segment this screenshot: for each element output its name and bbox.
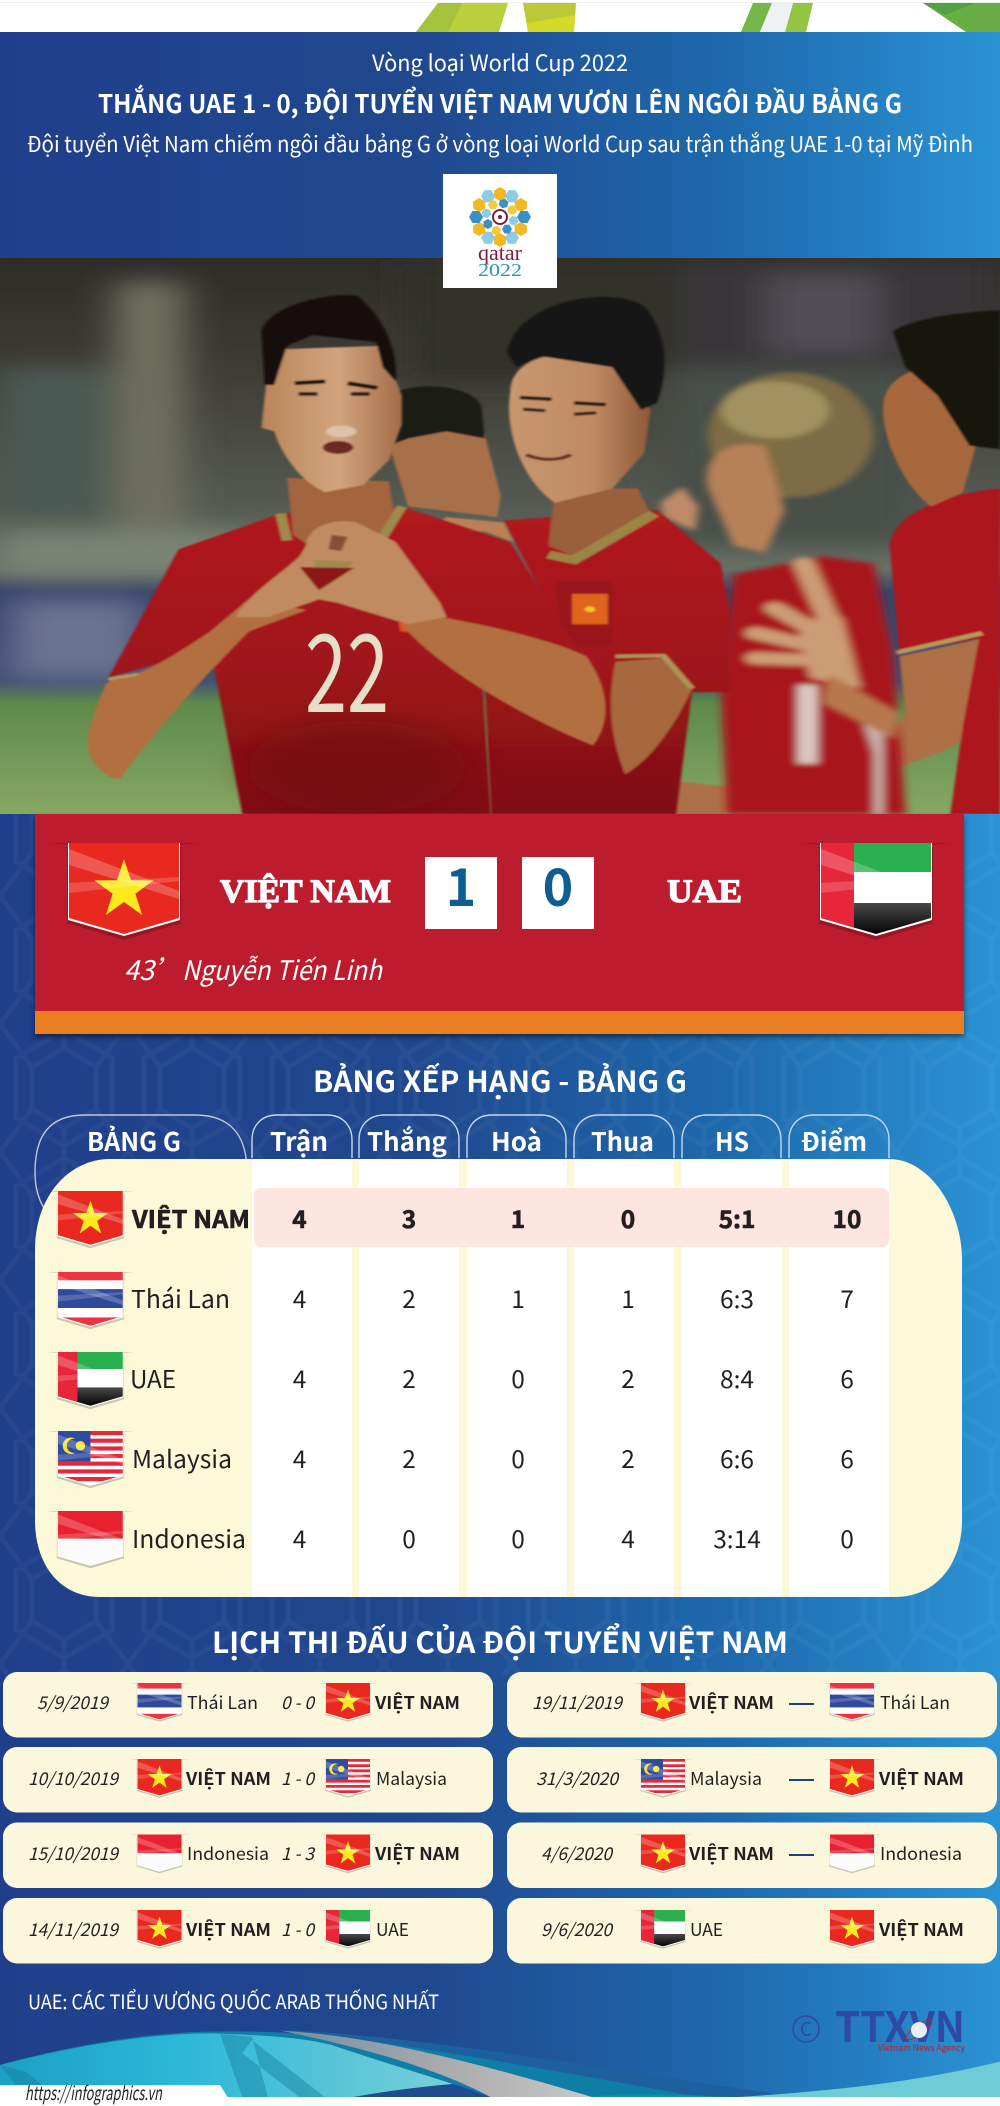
match 4/6/2020: Indonesia <box>880 1841 962 1866</box>
match 5/9/2019: Thái Lan <box>187 1690 258 1715</box>
heading: standings: BẢNG XẾP HẠNG - BẢNG G <box>313 1059 687 1101</box>
goal scorer: 43’ <box>124 949 181 988</box>
row: Thái Lan: 1 <box>511 1281 525 1316</box>
player far right <box>670 310 1000 814</box>
row: Indonesia: 0 <box>402 1521 416 1556</box>
row: Indonesia: 0 <box>840 1521 854 1556</box>
match 9/6/2020 <box>507 1898 997 1964</box>
row: Malaysia: 0 <box>511 1441 525 1476</box>
source URL tab: https://infographics.vn <box>25 2079 163 2106</box>
match 10/10/2019: Malaysia <box>376 1766 447 1791</box>
row: Việt Nam: 10 <box>833 1201 861 1236</box>
match 31/3/2020: Malaysia <box>690 1766 762 1791</box>
match 10/10/2019 <box>3 1747 493 1812</box>
panel: match score <box>35 814 964 1034</box>
match 5/9/2019: VIỆT NAM <box>374 1690 460 1715</box>
decorative green shapes on top strip <box>0 2 1000 32</box>
kicker text: Vòng loại World Cup 2022 <box>372 46 628 78</box>
row: UAE: 0 <box>511 1361 525 1396</box>
header tabs <box>35 1115 889 1222</box>
match 15/10/2019: 15/10/2019 <box>28 1841 120 1866</box>
match 9/6/2020: UAE <box>690 1917 723 1942</box>
panel: standings table <box>35 1115 962 1597</box>
row: Malaysia: 6 <box>840 1441 854 1476</box>
team name UAE: UAE <box>667 874 742 910</box>
panel: schedule right column <box>507 1672 997 1964</box>
icon: UAE flag <box>801 843 951 940</box>
match 9/6/2020: VIỆT NAM <box>878 1917 964 1942</box>
panel: schedule left column <box>3 1672 493 1964</box>
header labels: HS <box>715 1122 749 1159</box>
highlighted row <box>254 1188 889 1247</box>
row: UAE: 2 <box>621 1361 635 1396</box>
row: Malaysia <box>46 1431 854 1488</box>
row: Indonesia: 4 <box>621 1521 635 1556</box>
row: Việt Nam: VIỆT NAM <box>131 1201 250 1236</box>
jersey number 22: 22 <box>305 588 389 744</box>
row: Việt Nam: 5:1 <box>719 1201 755 1236</box>
header labels: Thắng <box>367 1122 447 1159</box>
match 5/9/2019 <box>3 1672 493 1738</box>
header labels <box>87 1122 867 1159</box>
main title: THẮNG UAE 1 - 0, ĐỘI TUYỂN VIỆT NAM VƯƠN LÊN NGÔI ĐẦU BẢNG G <box>98 84 902 121</box>
match 4/6/2020: VIỆT NAM <box>688 1841 774 1866</box>
match 4/6/2020: 4/6/2020 <box>541 1841 614 1866</box>
row: Thái Lan: 1 <box>621 1281 635 1316</box>
emblem mosaic <box>469 187 531 247</box>
match 14/11/2019: 1 - 0 <box>281 1917 316 1942</box>
row: UAE: 4 <box>293 1361 306 1396</box>
row: Indonesia: Indonesia <box>132 1521 246 1556</box>
match 9/6/2020: 9/6/2020 <box>541 1917 614 1942</box>
match 15/10/2019 <box>3 1822 493 1888</box>
match 14/11/2019: VIỆT NAM <box>185 1917 271 1942</box>
score box home <box>425 846 497 929</box>
row: UAE: 2 <box>402 1361 416 1396</box>
match 19/11/2019 <box>507 1672 997 1738</box>
row: Thái Lan: 2 <box>402 1281 416 1316</box>
photo: Vietnamese players celebrating <box>0 258 1000 814</box>
player behind main <box>389 386 501 517</box>
match 14/11/2019: UAE <box>376 1917 409 1942</box>
blond player behind <box>660 372 906 814</box>
row: Indonesia: 4 <box>293 1521 306 1556</box>
header labels: Thua <box>591 1122 654 1159</box>
match 19/11/2019: Thái Lan <box>880 1690 950 1715</box>
row: UAE <box>46 1352 854 1409</box>
logo: TTXVN: TTXVN <box>835 1994 965 2055</box>
score box away: 0 <box>543 846 573 921</box>
footer wave <box>0 2030 1000 2097</box>
row: Malaysia: 2 <box>621 1441 635 1476</box>
background arabesque pattern <box>0 814 1000 1676</box>
match 31/3/2020: 31/3/2020 <box>536 1766 620 1791</box>
header labels: Điểm <box>801 1122 867 1159</box>
row: Thái Lan: 7 <box>840 1281 854 1316</box>
main player number 22 jersey <box>88 295 606 814</box>
row: Indonesia <box>46 1511 854 1568</box>
match 19/11/2019: VIỆT NAM <box>688 1690 774 1715</box>
row: Việt Nam: 1 <box>511 1201 525 1236</box>
bottom white strip <box>0 2097 1000 2106</box>
row: Indonesia: 3:14 <box>713 1521 761 1556</box>
header labels: BẢNG G <box>87 1122 181 1159</box>
match 15/10/2019: VIỆT NAM <box>374 1841 460 1866</box>
row: Indonesia: 0 <box>511 1521 525 1556</box>
icon: Vietnam flag <box>49 843 199 940</box>
row: Thái Lan: Thái Lan <box>131 1281 230 1316</box>
row: Việt Nam: 3 <box>402 1201 416 1236</box>
score box away <box>522 846 594 929</box>
header labels: Hoà <box>491 1122 542 1159</box>
row: Việt Nam <box>46 1191 861 1248</box>
logo wordmark qatar: qatar <box>478 240 523 265</box>
table cream background <box>35 1159 962 1597</box>
goal scorer: Nguyễn Tiến Linh <box>182 949 383 988</box>
match 5/9/2019: 0 - 0 <box>281 1690 316 1715</box>
header labels: Trận <box>270 1122 328 1159</box>
heading: schedule: LỊCH THI ĐẤU CỦA ĐỘI TUYỂN VIỆT NAM <box>212 1620 788 1662</box>
row: Thái Lan <box>46 1272 854 1329</box>
row: Thái Lan: 6:3 <box>720 1281 754 1316</box>
score box home: 1 <box>446 846 476 921</box>
second player smiling <box>421 297 730 814</box>
match 10/10/2019: VIỆT NAM <box>185 1766 271 1791</box>
logo wordmark 2022: 2022 <box>478 260 522 280</box>
match 15/10/2019: 1 - 3 <box>281 1841 316 1866</box>
row: Việt Nam: 0 <box>621 1201 635 1236</box>
white columns <box>252 1159 889 1597</box>
match 31/3/2020: VIỆT NAM <box>878 1766 964 1791</box>
match 10/10/2019: 1 - 0 <box>281 1766 316 1791</box>
logo: TTXVN: Vietnam News Agency <box>878 2041 965 2054</box>
header text block <box>27 46 973 159</box>
row: UAE: 6 <box>840 1361 854 1396</box>
match 31/3/2020 <box>507 1747 997 1812</box>
row: Thái Lan: 4 <box>293 1281 306 1316</box>
row: Malaysia: 2 <box>402 1441 416 1476</box>
row: Malaysia: 6:6 <box>720 1441 754 1476</box>
match 14/11/2019 <box>3 1898 493 1964</box>
match 5/9/2019: 5/9/2019 <box>37 1690 110 1715</box>
match 15/10/2019: Indonesia <box>187 1841 269 1866</box>
row: Malaysia: 4 <box>293 1441 306 1476</box>
match 19/11/2019: 19/11/2019 <box>532 1690 624 1715</box>
row: Việt Nam: 4 <box>292 1201 307 1236</box>
logo: Qatar 2022 <box>443 174 557 288</box>
match 14/11/2019: 14/11/2019 <box>28 1917 120 1942</box>
match 10/10/2019: 10/10/2019 <box>28 1766 120 1791</box>
footnote: UAE: CÁC TIỂU VƯƠNG QUỐC ARAB THỐNG NHẤT <box>28 1986 439 2015</box>
logo: TTXVN: C <box>800 2015 812 2042</box>
row: UAE: UAE <box>130 1361 176 1396</box>
row: UAE: 8:4 <box>720 1361 754 1396</box>
row: Malaysia: Malaysia <box>132 1441 232 1476</box>
match 4/6/2020 <box>507 1822 997 1888</box>
team name Việt Nam: VIỆT NAM <box>220 872 391 910</box>
